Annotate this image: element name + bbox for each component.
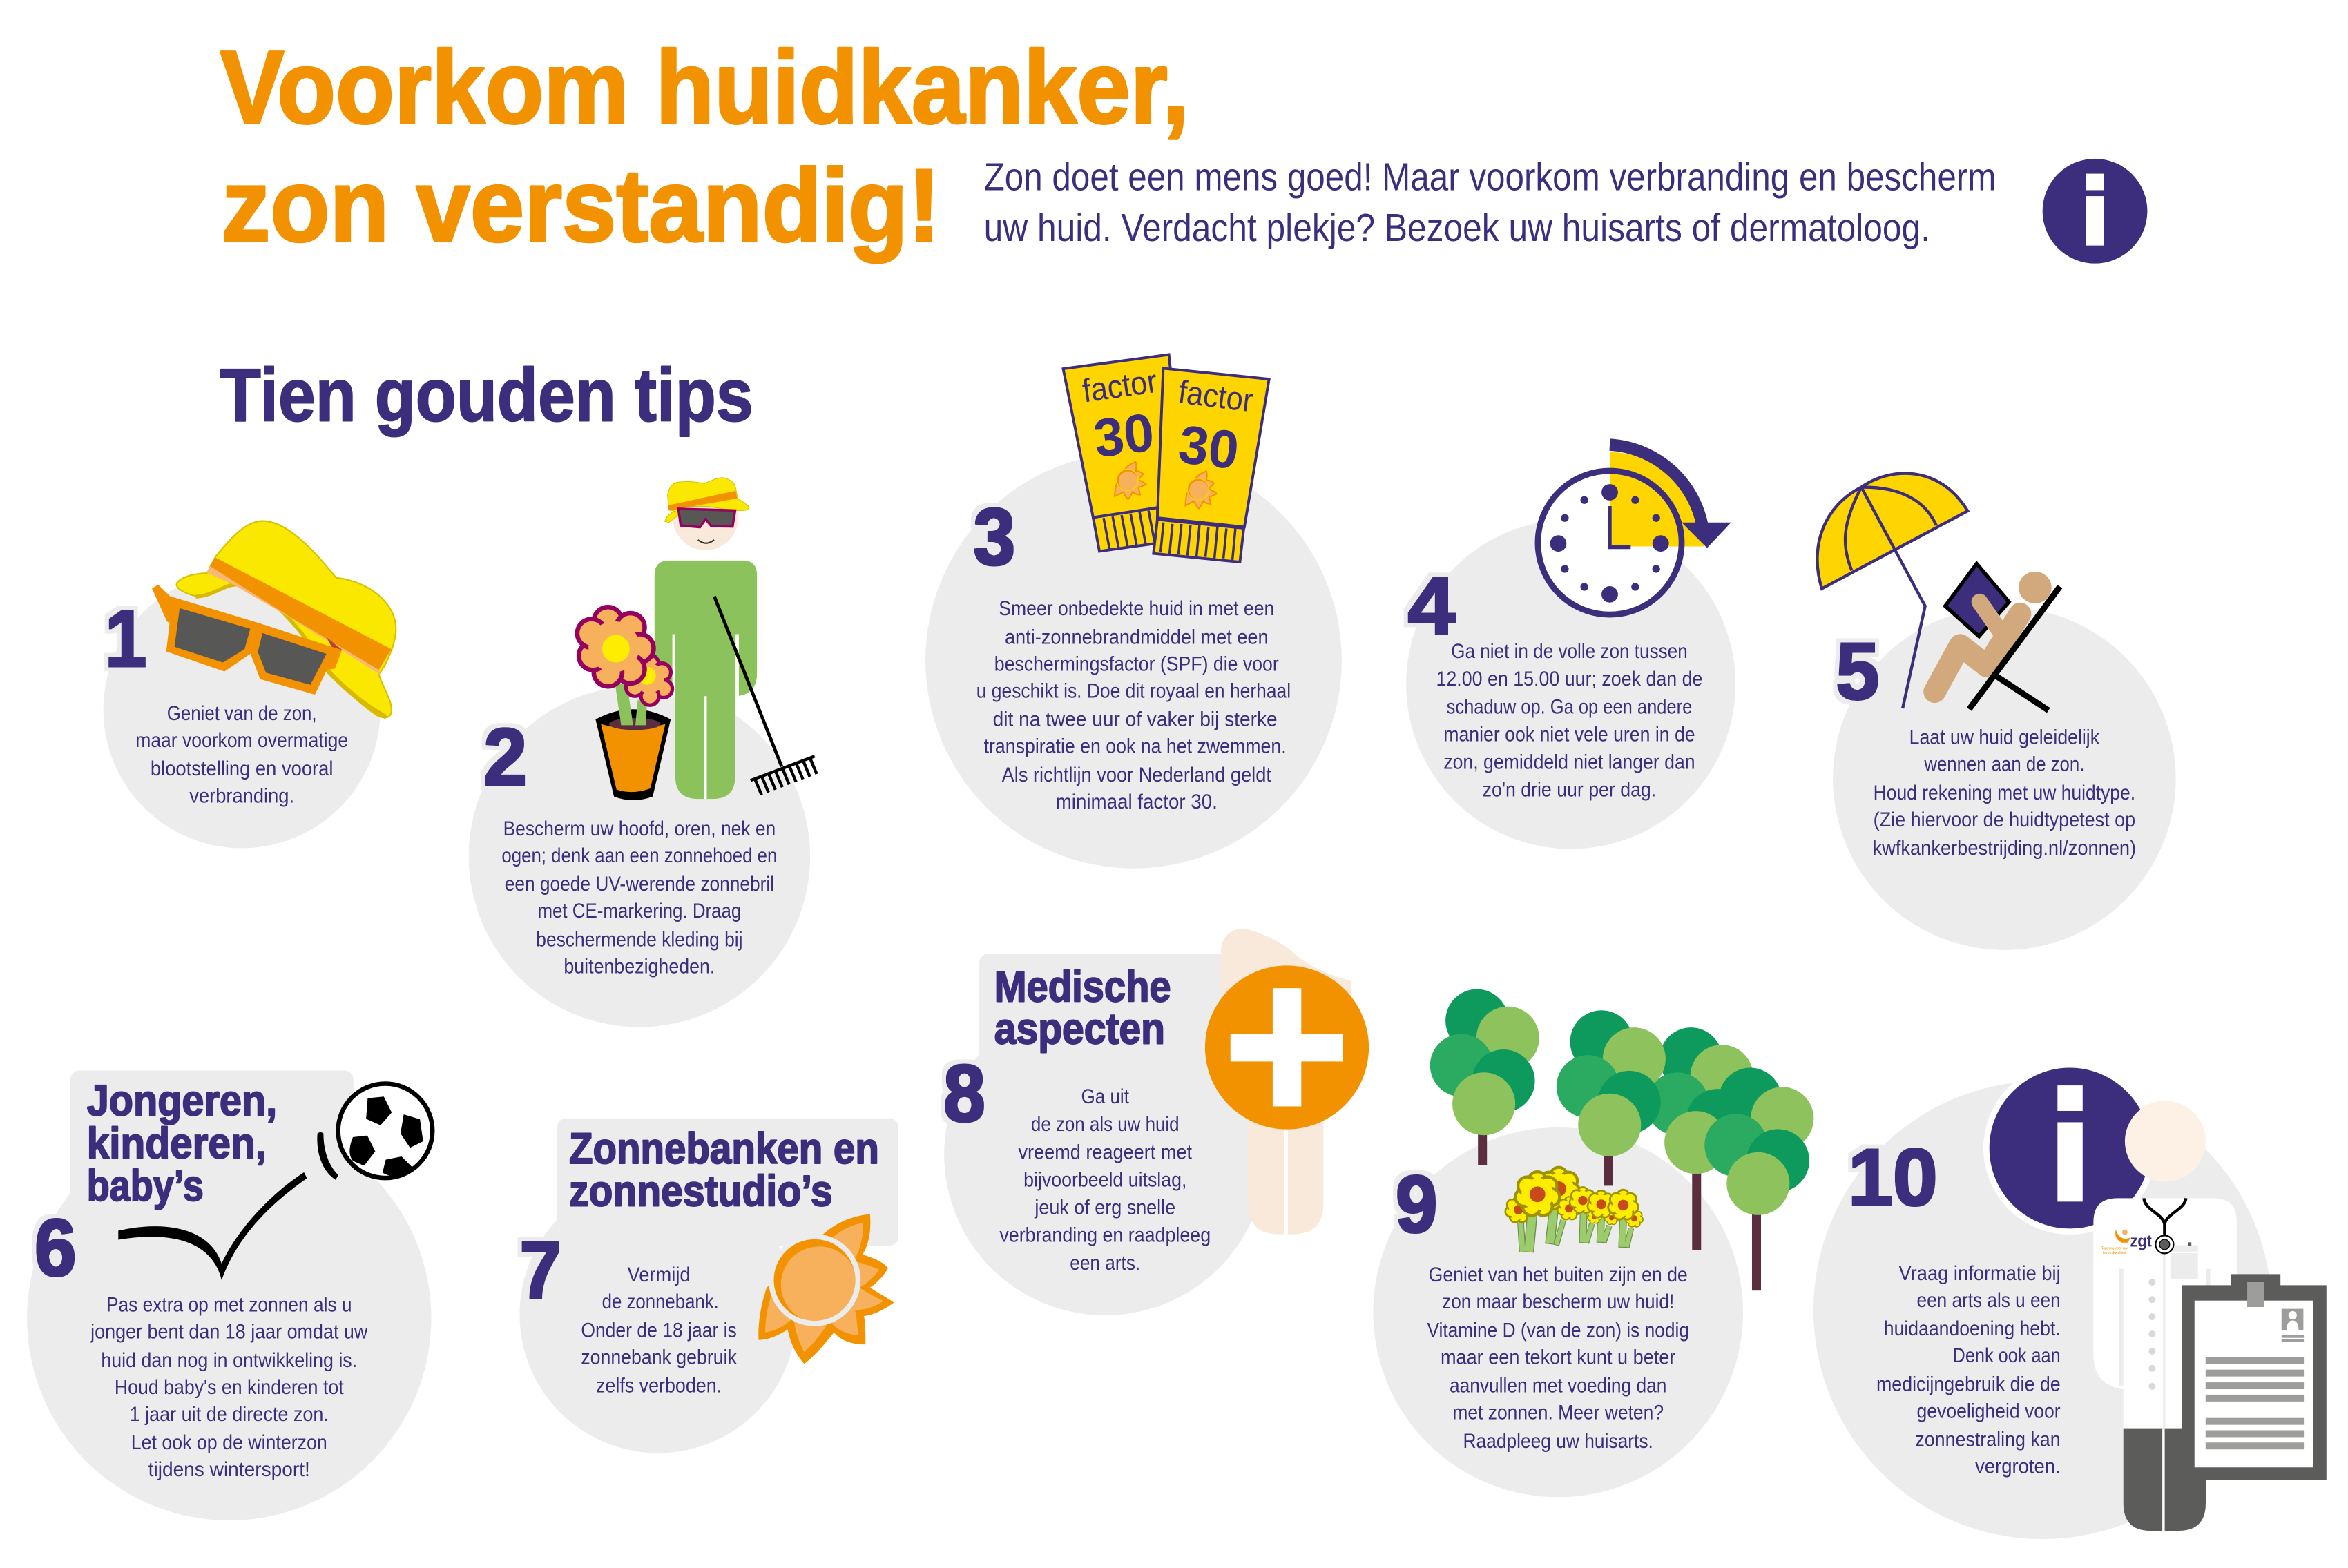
- text: jeuk of erg snelle: [1034, 1197, 1175, 1219]
- left tube: factor: [1080, 363, 1159, 410]
- text: zelfs verboden.: [596, 1375, 722, 1397]
- text: maar een tekort kunt u beter: [1441, 1346, 1676, 1368]
- text: jonger bent dan 18 jaar omdat uw: [90, 1322, 368, 1344]
- text: manier ook niet vele uren in de: [1443, 724, 1695, 746]
- text: met CE-markering. Draag: [537, 900, 741, 922]
- heading: [569, 1125, 879, 1216]
- icon: sun: [758, 1214, 894, 1364]
- heading: aspecten: [994, 1005, 1165, 1053]
- text: vreemd reageert met: [1018, 1141, 1192, 1163]
- heading: kinderen,: [87, 1119, 267, 1168]
- number 8: 8: [943, 1048, 985, 1139]
- icon: doctor: [2093, 1101, 2237, 1531]
- text: blootstelling en vooral: [151, 758, 333, 780]
- text: 12.00 en 15.00 uur; zoek dan de: [1436, 668, 1702, 690]
- icon: check-shaped bounce line: [118, 1172, 307, 1280]
- text: dit na twee uur of vaker bij sterke: [993, 709, 1278, 731]
- panel: tip 9: [1373, 989, 1813, 1497]
- number 6: 6: [35, 1202, 77, 1293]
- icon: trees: [1430, 989, 1813, 1290]
- icon: flowers: [1505, 1168, 1643, 1252]
- intro text: uw huid. Verdacht plekje? Bezoek uw huisarts of dermatoloog.: [984, 206, 1930, 249]
- text: ogen; denk aan een zonnehoed en: [501, 845, 777, 867]
- text: zon, gemiddeld niet langer dan: [1443, 751, 1695, 773]
- rake: [714, 597, 817, 795]
- icon: clipboard: [2182, 1274, 2327, 1480]
- panel: tip 6: [27, 1070, 432, 1520]
- icon: soccer ball: [317, 1083, 432, 1180]
- title: Voorkom huidkanker,: [220, 30, 1189, 145]
- text: met zonnen. Meer weten?: [1452, 1402, 1664, 1424]
- number 2: 2: [483, 711, 527, 802]
- logo: zgt: [2101, 1229, 2152, 1255]
- icon: info: [2043, 159, 2147, 264]
- text: Vitamine D (van de zon) is nodig: [1427, 1319, 1689, 1342]
- flower pot: [577, 607, 673, 800]
- panel: tip 10: [1813, 1065, 2327, 1539]
- text: Houd baby's en kinderen tot: [115, 1377, 344, 1399]
- text: kwfkankerbestrijding.nl/zonnen): [1873, 838, 2136, 860]
- text: Vermijd: [628, 1264, 691, 1286]
- text: [135, 703, 348, 807]
- text: zon maar bescherm uw huid!: [1442, 1291, 1674, 1313]
- number 4: 4: [1407, 560, 1456, 650]
- text: wennen aan de zon.: [1923, 754, 2084, 776]
- text: [1876, 1263, 2061, 1478]
- intro text: [984, 155, 1996, 249]
- panel: tip 1: [104, 521, 396, 848]
- text: bijvoorbeeld uitslag,: [1023, 1169, 1186, 1191]
- number 9: 9: [1396, 1159, 1438, 1250]
- text: een goede UV-werende zonnebril: [505, 873, 774, 896]
- text: minimaal factor 30.: [1056, 791, 1218, 813]
- text: beschermende kleding bij: [536, 929, 743, 951]
- text: Geniet van de zon,: [167, 703, 317, 725]
- text: Als richtlijn voor Nederland geldt: [1002, 764, 1271, 786]
- number 1: 1: [105, 593, 146, 684]
- panel: tip 8: [943, 929, 1369, 1315]
- text: Onder de 18 jaar is: [581, 1319, 737, 1342]
- logo: zgt: levenskwaliteit: [2103, 1251, 2126, 1255]
- heading: zonnestudio’s: [569, 1168, 833, 1216]
- icon: gardener: [577, 478, 817, 800]
- panel: tip 3: [925, 355, 1342, 869]
- text: zonnestraling kan: [1915, 1429, 2061, 1451]
- number 7: 7: [519, 1225, 561, 1315]
- text: [1436, 641, 1702, 802]
- heading: [994, 963, 1171, 1053]
- text: zo'n drie uur per dag.: [1483, 780, 1656, 802]
- icon: sunscreen tubes: [1064, 355, 1269, 562]
- text: Smeer onbedekte huid in met een: [999, 598, 1274, 620]
- text: [1427, 1264, 1689, 1453]
- heading: baby’s: [87, 1162, 204, 1210]
- text: Raadpleeg uw huisarts.: [1463, 1431, 1653, 1453]
- title: zon verstandig!: [222, 148, 941, 263]
- text: medicijngebruik die de: [1876, 1373, 2061, 1395]
- text: schaduw op. Ga op een andere: [1447, 696, 1692, 718]
- right tube: factor: [1176, 374, 1255, 419]
- title: [220, 30, 1189, 263]
- text: transpiratie en ook na het zwemmen.: [984, 736, 1287, 758]
- text: Vraag informatie bij: [1898, 1263, 2061, 1285]
- icon: medical figure with cross: [1205, 929, 1369, 1235]
- text: Denk ook aan: [1953, 1345, 2061, 1367]
- text: [581, 1264, 737, 1397]
- text: beschermingsfactor (SPF) die voor: [994, 653, 1279, 675]
- text: Ga niet in de volle zon tussen: [1451, 641, 1688, 663]
- panel: tip 5: [1817, 474, 2176, 950]
- panel: tip 4: [1406, 445, 1735, 849]
- text: buitenbezigheden.: [564, 956, 715, 978]
- text: tijdens wintersport!: [148, 1459, 310, 1481]
- text: vergroten.: [1975, 1456, 2061, 1478]
- icon: clock: [1538, 445, 1731, 614]
- text: Pas extra op met zonnen als u: [106, 1295, 352, 1317]
- text: [1873, 727, 2136, 860]
- text: [90, 1295, 368, 1481]
- heading: [87, 1076, 277, 1210]
- text: huid dan nog in ontwikkeling is.: [101, 1350, 357, 1372]
- text: een arts als u een: [1917, 1290, 2061, 1312]
- text: Ga uit: [1081, 1086, 1129, 1108]
- icon: hat and sunglasses: [152, 521, 396, 717]
- text: u geschikt is. Doe dit royaal en herhaal: [976, 680, 1291, 702]
- intro text: Zon doet een mens goed! Maar voorkom verbranding en bescherm: [984, 155, 1996, 198]
- heading: Medische: [994, 963, 1171, 1012]
- left tube: [1064, 355, 1173, 551]
- text: Bescherm uw hoofd, oren, nek en: [503, 818, 776, 840]
- text: gevoeligheid voor: [1917, 1400, 2061, 1422]
- text: Let ook op de winterzon: [131, 1432, 327, 1454]
- text: Laat uw huid geleidelijk: [1909, 727, 2099, 749]
- logo: zgt: Topzorg voor uw: [2101, 1247, 2128, 1251]
- text: anti-zonnebrandmiddel met een: [1005, 626, 1269, 648]
- text: [501, 818, 777, 978]
- icon: parasol: [1817, 474, 1967, 708]
- icon: info: [1986, 1065, 2153, 1232]
- right tube: 30: [1175, 414, 1242, 481]
- heading: tien gouden tips: Tien gouden tips: [220, 353, 753, 436]
- text: de zonnebank.: [602, 1291, 719, 1313]
- text: verbranding.: [189, 785, 294, 807]
- text: [999, 1086, 1211, 1275]
- logo: zgt: zgt: [2130, 1232, 2152, 1250]
- text: [976, 598, 1291, 813]
- text: verbranding en raadpleeg: [999, 1225, 1211, 1247]
- text: Houd rekening met uw huidtype.: [1874, 782, 2135, 804]
- text: Geniet van het buiten zijn en de: [1429, 1264, 1688, 1286]
- number 3: 3: [973, 492, 1015, 582]
- panel: tip 2: [469, 478, 817, 1027]
- number 5: 5: [1836, 626, 1879, 717]
- text: een arts.: [1070, 1252, 1140, 1275]
- number 10: 10: [1848, 1132, 1938, 1223]
- panel: tip 7: [519, 1119, 898, 1453]
- text: aanvullen met voeding dan: [1450, 1375, 1666, 1397]
- heading: Zonnebanken en: [569, 1125, 879, 1173]
- text: (Zie hiervoor de huidtypetest op: [1874, 809, 2135, 831]
- right tube: [1153, 368, 1269, 562]
- text: maar voorkom overmatige: [135, 730, 348, 752]
- left tube: 30: [1090, 401, 1157, 469]
- text: de zon als uw huid: [1031, 1114, 1180, 1136]
- text: zonnebank gebruik: [581, 1346, 737, 1368]
- heading: Jongeren,: [87, 1076, 277, 1125]
- icon: sunbather: [1935, 563, 2060, 710]
- text: huidaandoening hebt.: [1884, 1318, 2061, 1340]
- text: 1 jaar uit de directe zon.: [130, 1404, 329, 1426]
